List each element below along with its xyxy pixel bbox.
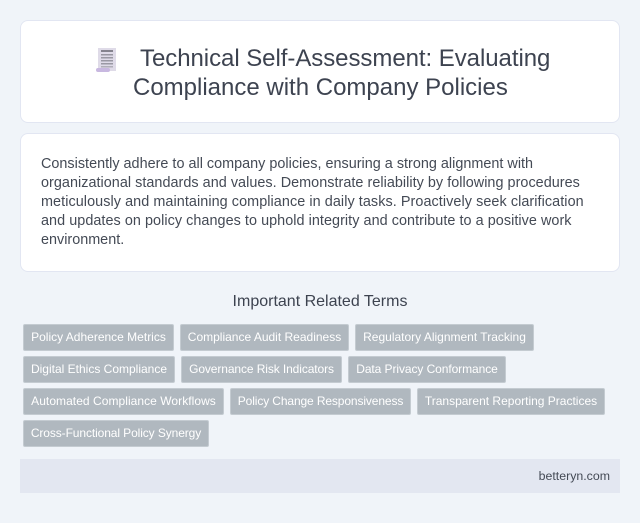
footer text: betteryn.com: betteryn.com xyxy=(539,469,610,483)
tag: Regulatory Alignment Tracking xyxy=(355,324,534,351)
heading: title: Technical Self-Assessment: Evaluating xyxy=(140,45,550,72)
tag: Digital Ethics Compliance: Digital Ethics Compliance xyxy=(31,362,167,376)
panel: description xyxy=(20,133,620,272)
tag: Policy Adherence Metrics xyxy=(23,324,174,351)
text block: description paragraph: environment. xyxy=(41,232,124,248)
icon: policy document scroll xyxy=(96,48,116,72)
tag: Cross-Functional Policy Synergy: Cross-Functional Policy Synergy xyxy=(31,426,201,440)
tag: Data Privacy Conformance xyxy=(348,356,506,383)
tag: Digital Ethics Compliance xyxy=(23,356,175,383)
text block: description paragraph: meticulously and maintaining compliance in daily tasks. Proactively seek clarification xyxy=(41,194,584,210)
text block: description paragraph: Consistently adhere to all company policies, ensuring a strong alignment with xyxy=(41,156,533,172)
heading: title: Compliance with Company Policies xyxy=(133,74,508,101)
tag list xyxy=(23,324,605,447)
tag: Automated Compliance Workflows xyxy=(23,388,224,415)
tag: Automated Compliance Workflows: Automated Compliance Workflows xyxy=(31,394,216,408)
tag: Policy Adherence Metrics: Policy Adherence Metrics xyxy=(31,330,166,344)
tag: Compliance Audit Readiness: Compliance Audit Readiness xyxy=(188,330,341,344)
footer bar xyxy=(20,459,620,493)
text block: description paragraph xyxy=(41,156,584,248)
tag: Transparent Reporting Practices xyxy=(417,388,605,415)
heading: important related terms: Important Related Terms xyxy=(233,293,407,310)
tag: Policy Change Responsiveness: Policy Change Responsiveness xyxy=(238,394,403,408)
tag: Compliance Audit Readiness xyxy=(180,324,349,351)
tag: Governance Risk Indicators xyxy=(181,356,342,383)
text block: description paragraph: and updates on policy changes to uphold integrity and contribute to a positive work xyxy=(41,213,572,229)
tag: Cross-Functional Policy Synergy xyxy=(23,420,209,447)
tag: Data Privacy Conformance: Data Privacy Conformance xyxy=(356,362,498,376)
heading: title xyxy=(133,45,550,101)
panel: title card xyxy=(20,20,620,123)
tag: Governance Risk Indicators: Governance Risk Indicators xyxy=(189,362,334,376)
tag: Transparent Reporting Practices: Transparent Reporting Practices xyxy=(425,394,597,408)
tag: Policy Change Responsiveness xyxy=(230,388,411,415)
tag: Regulatory Alignment Tracking: Regulatory Alignment Tracking xyxy=(363,330,526,344)
text block: description paragraph: organizational standards and values. Demonstrate reliability by following procedures xyxy=(41,175,580,191)
